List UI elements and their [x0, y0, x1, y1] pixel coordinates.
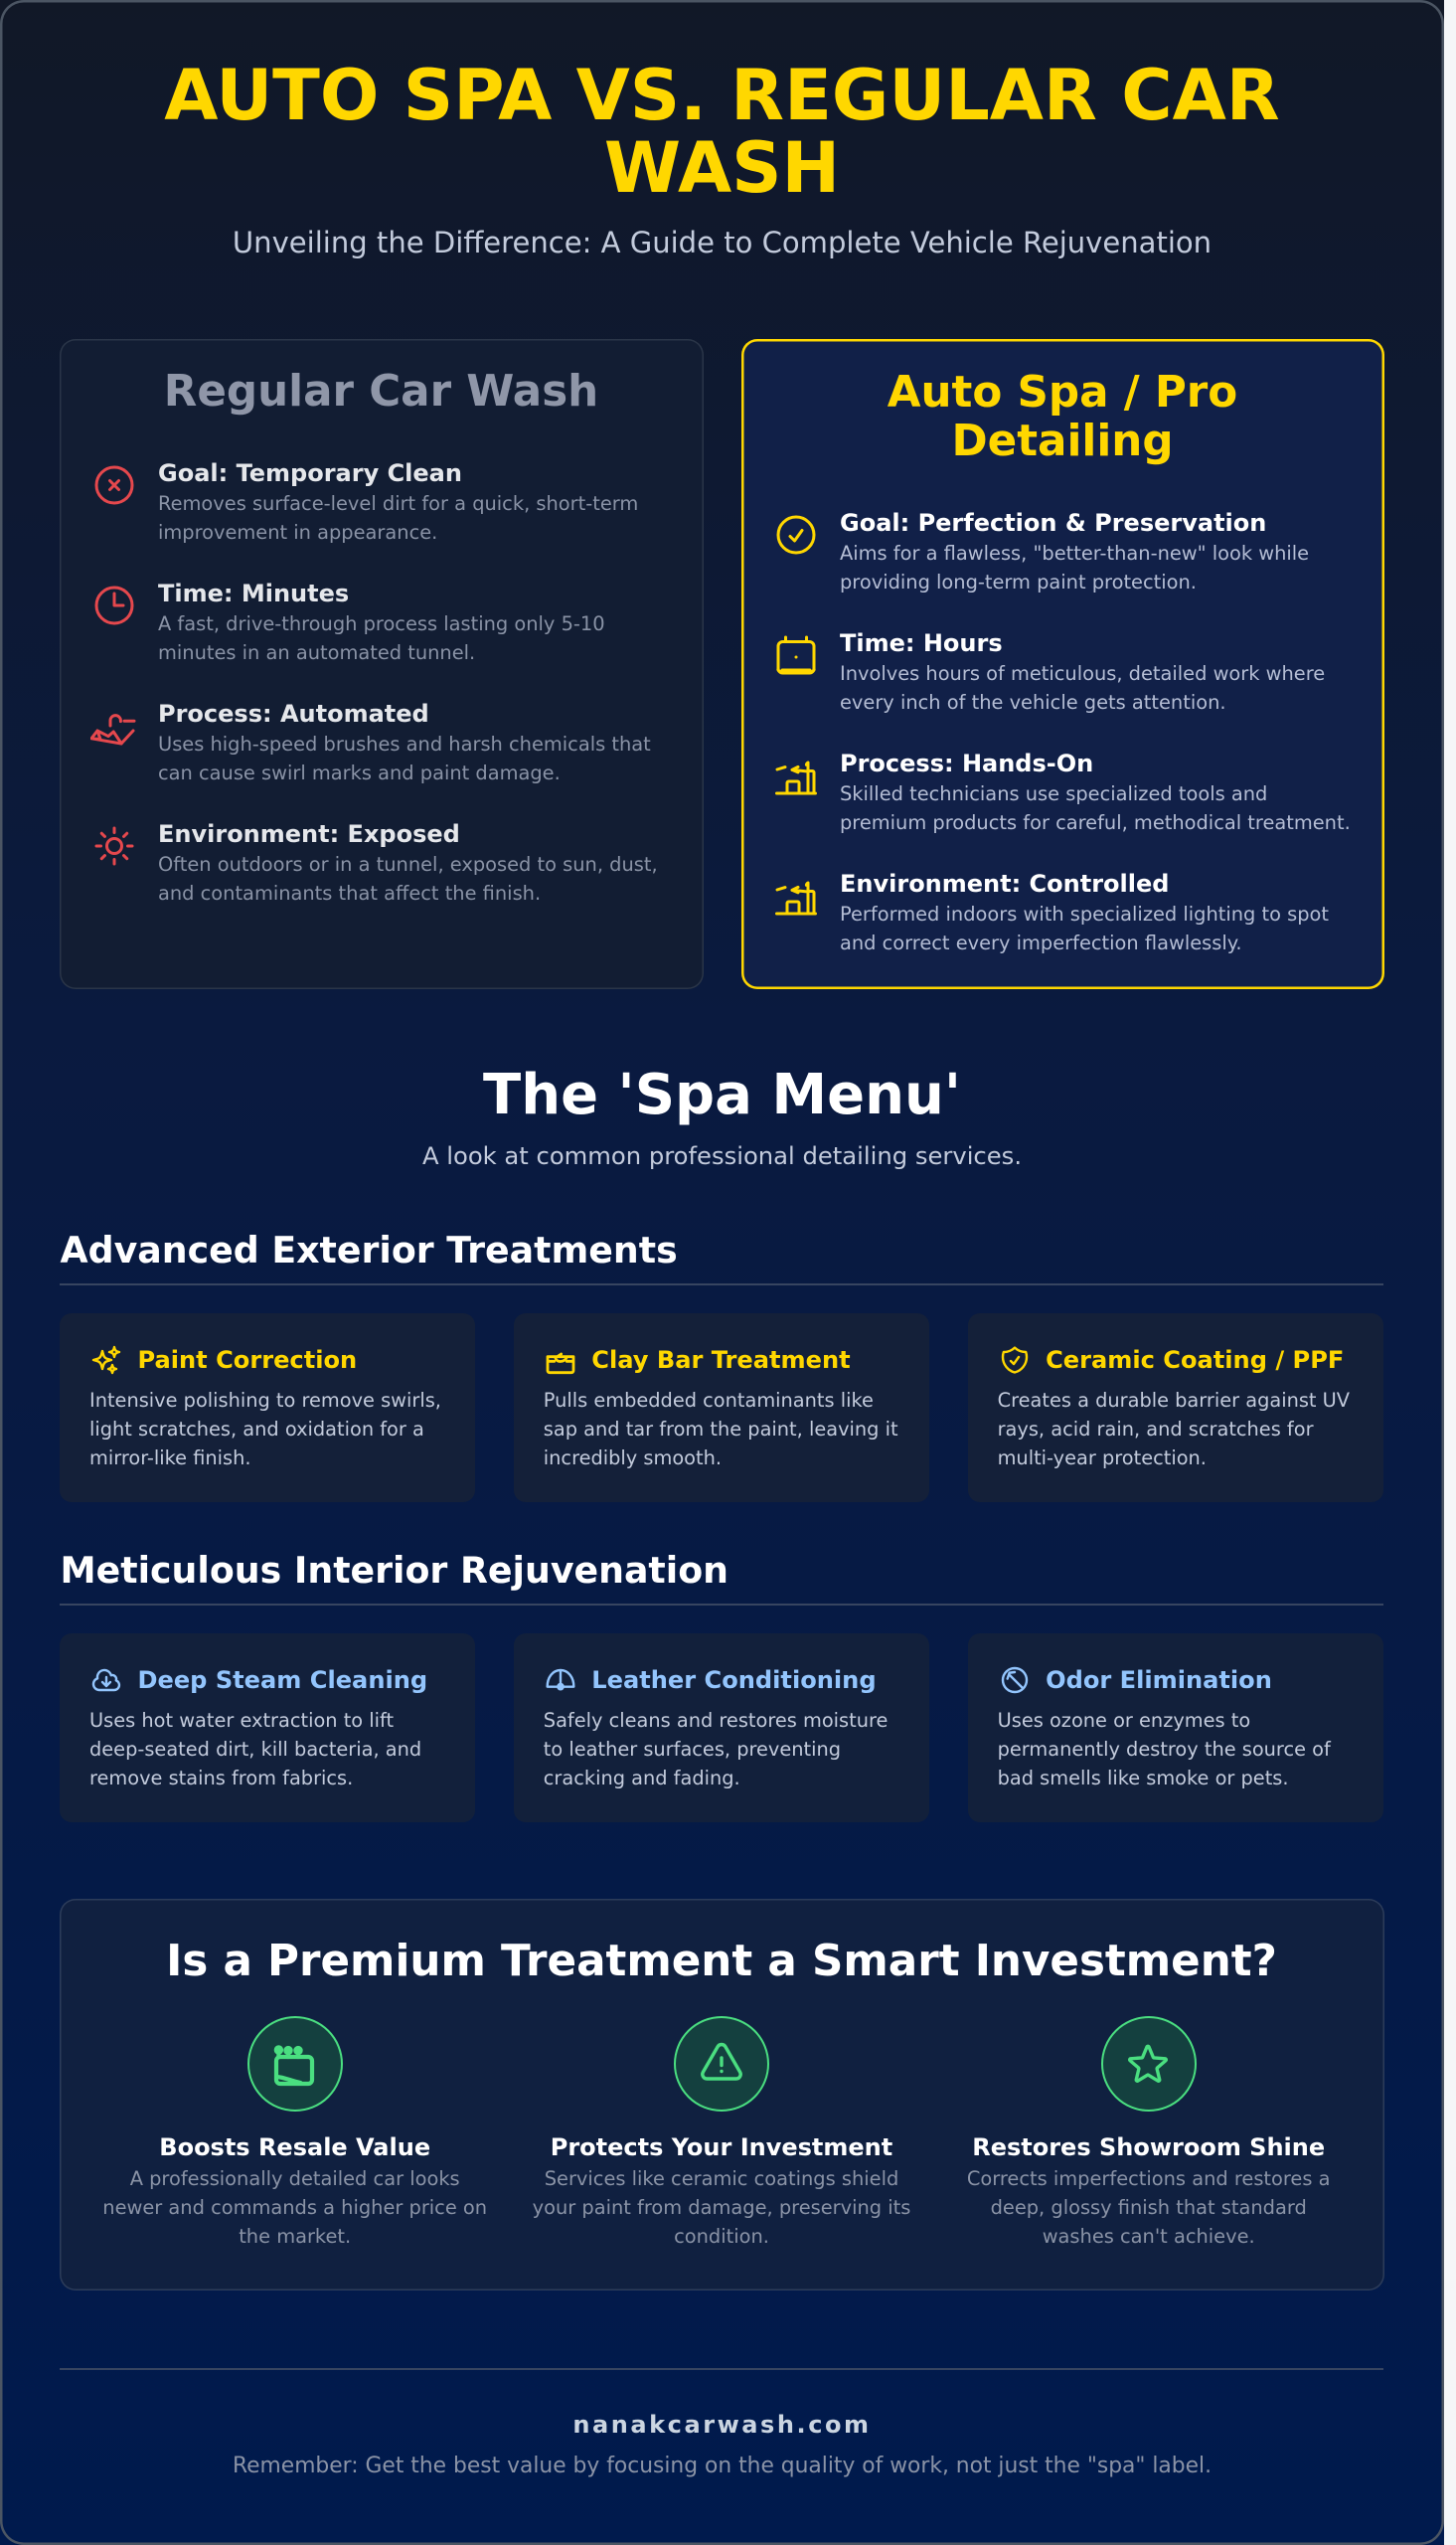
section heading: advanced exterior treatments: Advanced Exterior Treatments — [60, 1229, 678, 1272]
card: leather conditioning: to leather surfaces, preventing — [544, 1738, 841, 1761]
benefit: protects investment: Services like ceramic coatings shield — [545, 2167, 898, 2190]
card: odor elimination: Uses ozone or enzymes to — [998, 1709, 1250, 1732]
card: odor elimination — [968, 1633, 1383, 1822]
benefit: protects investment: condition. — [674, 2225, 769, 2248]
item: time hours: Time: Hours — [840, 629, 1003, 657]
item: goal perfection — [777, 509, 1309, 594]
card: deep steam cleaning: Deep Steam Cleaning — [137, 1666, 427, 1694]
heading: the spa menu: The 'Spa Menu' — [483, 1063, 961, 1127]
benefit: resale value: the market. — [239, 2225, 351, 2248]
item: process hands-on: premium products for careful, methodical treatment. — [840, 811, 1351, 834]
benefit: resale value: Boosts Resale Value — [159, 2133, 430, 2161]
card: ceramic coating: Creates a durable barrier against UV — [998, 1389, 1350, 1412]
panel: regular car wash — [60, 339, 704, 988]
card: clay bar treatment: Pulls embedded contaminants like — [544, 1389, 874, 1412]
benefit: showroom shine — [967, 2016, 1331, 2248]
heading: smart investment: Is a Premium Treatment a Smart Investment? — [166, 1937, 1277, 1986]
card: clay bar treatment: Clay Bar Treatment — [591, 1346, 851, 1374]
card: ceramic coating — [968, 1313, 1383, 1502]
card: paint correction: mirror-like finish. — [89, 1446, 251, 1469]
subheading: spa menu: A look at common professional detailing services. — [422, 1141, 1022, 1170]
item: environment exposed: Environment: Exposed — [158, 820, 460, 848]
item: goal temporary clean: Removes surface-level dirt for a quick, short-term — [158, 492, 638, 515]
icon: star — [1101, 2016, 1197, 2112]
item: time hours — [776, 629, 1325, 714]
item: goal temporary clean — [95, 459, 638, 544]
footer note: Remember: Get the best value by focusing on the quality of work, not just the "spa" label. — [233, 2454, 1212, 2478]
card: ceramic coating: multi-year protection. — [998, 1446, 1207, 1469]
item: process hands-on: Skilled technicians use specialized tools and — [840, 782, 1267, 805]
card: odor elimination: bad smells like smoke or pets. — [998, 1767, 1289, 1789]
item: process automated: Process: Automated — [158, 700, 429, 728]
card: deep steam cleaning: remove stains from fabrics. — [89, 1767, 353, 1789]
benefit: showroom shine: washes can't achieve. — [1043, 2225, 1255, 2248]
item: environment exposed: Often outdoors or in a tunnel, exposed to sun, dust, — [158, 853, 658, 876]
item: goal perfection: providing long-term paint protection. — [840, 571, 1197, 594]
heading: regular car wash: Regular Car Wash — [164, 367, 598, 417]
item: process automated — [90, 700, 651, 784]
card: clay bar treatment: sap and tar from the paint, leaving it — [544, 1418, 898, 1441]
item: time hours: every inch of the vehicle gets attention. — [840, 691, 1226, 714]
heading: auto spa pro detailing: Auto Spa / Pro — [888, 368, 1237, 418]
benefit: protects investment: your paint from damage, preserving its — [533, 2196, 910, 2219]
item: process hands-on — [775, 750, 1351, 834]
item: time minutes: Time: Minutes — [158, 580, 349, 607]
item: environment controlled — [775, 870, 1329, 954]
item: time minutes: minutes in an automated tunnel. — [158, 641, 475, 664]
title — [164, 55, 1280, 209]
item: time minutes — [95, 580, 605, 664]
card: leather conditioning: cracking and fading. — [544, 1767, 740, 1789]
benefit: resale value: A professionally detailed car looks — [130, 2167, 460, 2190]
item: time hours: Involves hours of meticulous, detailed work where — [840, 662, 1325, 685]
item: environment controlled: Environment: Controlled — [840, 870, 1169, 898]
panel: smart investment — [60, 1899, 1383, 2290]
benefit: showroom shine: Restores Showroom Shine — [972, 2133, 1325, 2161]
item: time minutes: A fast, drive-through process lasting only 5-10 — [158, 612, 605, 635]
benefit: resale value — [102, 2016, 487, 2248]
card: deep steam cleaning — [60, 1633, 475, 1822]
section heading: meticulous interior rejuvenation: Meticulous Interior Rejuvenation — [60, 1549, 728, 1592]
benefit: showroom shine: deep, glossy finish that standard — [991, 2196, 1307, 2219]
title: AUTO SPA VS. REGULAR CAR — [164, 55, 1280, 136]
item: process automated: Uses high-speed brushes and harsh chemicals that — [158, 733, 651, 756]
benefit: protects investment: Protects Your Investment — [551, 2133, 892, 2161]
item: goal perfection: Goal: Perfection & Preservation — [840, 509, 1266, 537]
card: odor elimination: permanently destroy the source of — [998, 1738, 1331, 1761]
card: leather conditioning: Leather Conditioning — [591, 1666, 877, 1694]
item: process hands-on: Process: Hands-On — [840, 750, 1093, 777]
card: paint correction — [60, 1313, 475, 1502]
title: WASH — [604, 127, 840, 209]
benefit: protects investment — [533, 2016, 910, 2248]
card: paint correction: Paint Correction — [137, 1346, 357, 1374]
item: goal temporary clean: improvement in appearance. — [158, 521, 437, 544]
item: environment exposed: and contaminants that affect the finish. — [158, 882, 541, 905]
card: paint correction: light scratches, and oxidation for a — [89, 1418, 424, 1441]
item: goal perfection: Aims for a flawless, "better-than-new" look while — [840, 542, 1309, 565]
heading: auto spa pro detailing — [888, 368, 1237, 466]
item: goal temporary clean: Goal: Temporary Clean — [158, 459, 462, 487]
item: environment controlled: Performed indoors with specialized lighting to spot — [840, 903, 1329, 926]
item: environment exposed — [95, 820, 658, 905]
benefit: resale value: newer and commands a higher price on — [102, 2196, 487, 2219]
icon: resale — [247, 2016, 343, 2112]
subtitle: Unveiling the Difference: A Guide to Complete Vehicle Rejuvenation — [233, 226, 1212, 259]
card: clay bar treatment — [514, 1313, 929, 1502]
card: clay bar treatment: incredibly smooth. — [544, 1446, 722, 1469]
panel: auto spa pro detailing — [741, 339, 1383, 988]
card: ceramic coating: Ceramic Coating / PPF — [1046, 1346, 1344, 1374]
card: ceramic coating: rays, acid rain, and scratches for — [998, 1418, 1314, 1441]
card: deep steam cleaning: Uses hot water extraction to lift — [89, 1709, 394, 1732]
card: deep steam cleaning: deep-seated dirt, kill bacteria, and — [89, 1738, 421, 1761]
card: odor elimination: Odor Elimination — [1046, 1666, 1272, 1694]
item: process automated: can cause swirl marks and paint damage. — [158, 762, 561, 784]
card: leather conditioning — [514, 1633, 929, 1822]
card: leather conditioning: Safely cleans and restores moisture — [544, 1709, 888, 1732]
benefit: showroom shine: Corrects imperfections and restores a — [967, 2167, 1331, 2190]
footer brand: nanakcarwash.com — [572, 2411, 872, 2439]
item: environment controlled: and correct every imperfection flawlessly. — [840, 932, 1242, 954]
icon: warning — [674, 2016, 769, 2112]
heading: auto spa pro detailing: Detailing — [951, 417, 1174, 466]
card: paint correction: Intensive polishing to remove swirls, — [89, 1389, 441, 1412]
